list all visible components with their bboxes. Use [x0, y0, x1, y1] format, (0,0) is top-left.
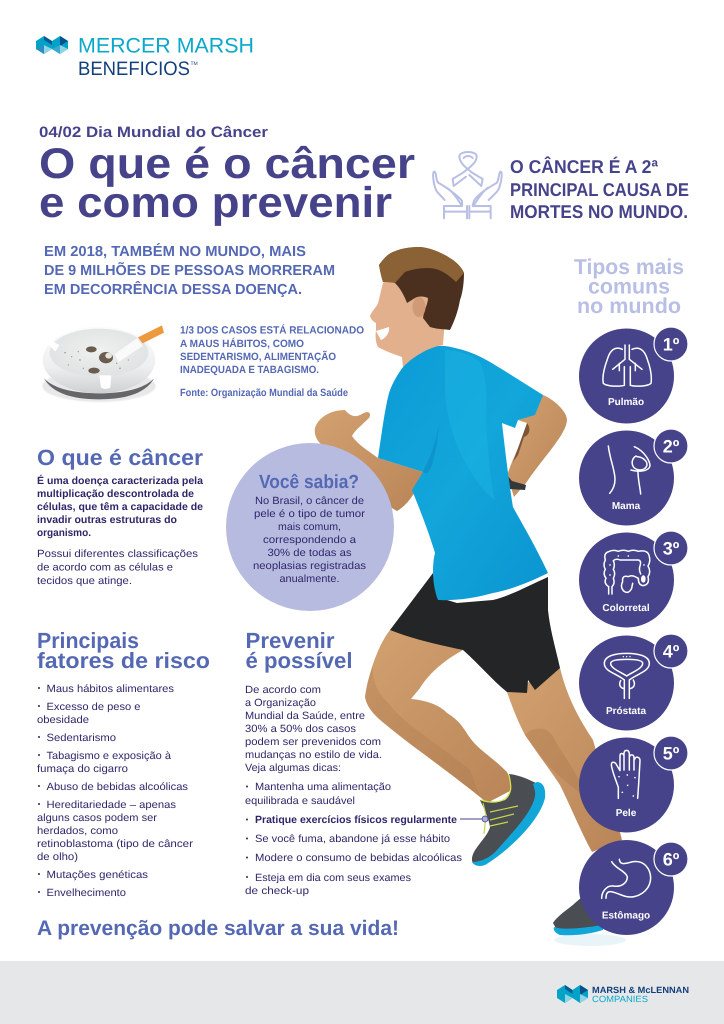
footer band [0, 961, 724, 1024]
label: Próstata [606, 706, 646, 717]
risk list: fumaça do cigarro [37, 763, 128, 775]
logo: Mercer Marsh Beneficios: MERCER MARSH [78, 34, 254, 58]
text block: 9 million deaths: EM DECORRÊNCIA DESSA DOENÇA. [44, 281, 302, 298]
title [39, 140, 415, 227]
risk list: retinoblastoma (tipo de câncer [37, 838, 194, 850]
badge 2: mama [579, 429, 688, 526]
logo: Mercer Marsh Beneficios: TM [190, 61, 198, 67]
callout: second cause of death: PRINCIPAL CAUSA DE [510, 179, 689, 200]
logo: Mercer Marsh Beneficios [36, 34, 254, 80]
text: skin cancer fact: neoplasias registradas [253, 560, 366, 572]
back foot [553, 897, 626, 946]
heading: tipos mais comuns: no mundo [577, 294, 681, 318]
intro: Veja algumas dicas: [245, 762, 341, 774]
icon: logo mark [36, 36, 68, 54]
circle: você sabia [226, 443, 394, 611]
panel: prevenir é possível [245, 628, 462, 897]
text: skin cancer fact: anualmente. [280, 573, 340, 585]
panel: fatores de risco [37, 628, 210, 899]
tips list [245, 781, 462, 897]
text block: 9 million deaths: DE 9 MILHÕES DE PESSOAS MORRERAM [44, 262, 335, 279]
front leg [365, 630, 512, 803]
text block: 9 million deaths: EM 2018, TAMBÉM NO MUNDO, MAIS [44, 243, 306, 260]
rank: 4º [663, 642, 680, 662]
label: Mama [612, 501, 641, 512]
badge 1: pulmão [579, 327, 688, 424]
risk list: Excesso de peso e [46, 701, 141, 713]
risk list: obesidade [37, 714, 89, 726]
heading: você sabia: Você sabia? [259, 472, 359, 493]
badge 5: pele [579, 736, 688, 832]
icon: breast [608, 446, 650, 494]
back leg [507, 668, 622, 852]
intro: mudanças no estilo de vida. [245, 749, 382, 761]
definition [37, 474, 203, 539]
heading: Principais [37, 628, 139, 653]
rank: 5º [663, 744, 680, 764]
risk list: Envelhecimento [46, 887, 126, 899]
text: skin cancer fact: 30% de todas as [268, 547, 352, 559]
risk list [37, 683, 194, 899]
front arm and hand [315, 410, 423, 511]
image: ashtray with cigarette [42, 325, 164, 402]
tips list: equilibrada e saudável [245, 795, 355, 807]
definition: invadir outras estruturas do [37, 514, 177, 526]
badge 3: colorretal [579, 531, 688, 628]
risk list: Tabagismo e exposição à [46, 750, 171, 762]
date line: 04/02 Dia Mundial do Câncer [39, 124, 268, 141]
tips list: Modere o consumo de bebidas alcoólicas [255, 852, 462, 864]
rank: 3º [663, 538, 680, 558]
risk list: Hereditariedade – apenas [46, 799, 176, 811]
classifications: de acordo com as células e [37, 562, 173, 574]
icon: logo mark [557, 985, 588, 1003]
logo: Marsh & McLennan Companies: MARSH & McLENNAN [592, 985, 689, 995]
badge 6: estômago [579, 840, 688, 935]
callout: second cause of death: MORTES NO MUNDO. [510, 201, 688, 222]
text block: one third of cases [180, 324, 364, 399]
text: skin cancer fact [253, 495, 366, 585]
tips list: Se você fuma, abandone já esse hábito [255, 833, 450, 845]
rank: 2º [663, 436, 680, 456]
heading: é possível [246, 648, 352, 673]
callout: second cause of death [510, 156, 689, 222]
rank: 6º [663, 850, 680, 870]
shorts [390, 573, 560, 693]
heading: Prevenir [246, 628, 335, 653]
front shoe [472, 774, 545, 866]
label: Colorretal [602, 603, 650, 614]
tips list: Mantenha uma alimentação [255, 781, 391, 793]
definition: multiplicação descontrolada de [37, 488, 194, 500]
icon: lungs [603, 345, 651, 386]
heading [37, 628, 210, 673]
text block: one third of cases: INADEQUADA E TABAGISMO. [180, 364, 319, 376]
heading: fatores de risco [37, 648, 210, 673]
callout: second cause of death: O CÂNCER É A 2ª [510, 156, 658, 177]
intro: De acordo com [245, 684, 321, 696]
risk list: Sedentarismo [46, 732, 116, 744]
badge 4: próstata [579, 634, 688, 730]
text block: one third of cases: 1/3 DOS CASOS ESTÁ RELACIONADO [180, 324, 364, 336]
logo: Marsh & McLennan Companies [557, 985, 689, 1004]
icon: hand [611, 750, 640, 798]
head [370, 247, 464, 367]
icon: stomach [602, 859, 651, 898]
risk list: herdados, como [37, 825, 118, 837]
heading: tipos mais comuns [574, 255, 684, 318]
label: Pele [616, 808, 637, 819]
intro: a Organização [245, 697, 316, 709]
intro: podem ser prevenidos com [245, 736, 381, 748]
text: skin cancer fact: pele é o tipo de tumor [254, 508, 366, 520]
risk list: de olho) [37, 851, 78, 863]
text: skin cancer fact: No Brasil, o câncer de [255, 495, 364, 507]
definition: É uma doença caracterizada pela [37, 474, 203, 487]
title: O que é o câncer [39, 140, 415, 188]
risk list: alguns casos podem ser [37, 812, 158, 824]
closing message: A prevenção pode salvar a sua vida! [37, 917, 399, 940]
text block: one third of cases: SEDENTARISMO, ALIMENTAÇÃO [180, 350, 336, 363]
risk list: Abuso de bebidas alcoólicas [46, 781, 188, 793]
label: Pulmão [608, 397, 644, 408]
intro [245, 684, 382, 774]
pointer line to shoe [460, 816, 488, 822]
text block: one third of cases: A MAUS HÁBITOS, COMO [180, 337, 304, 350]
rank: 1º [663, 334, 680, 354]
logo: Mercer Marsh Beneficios: BENEFICIOS [78, 58, 190, 80]
icon: colon [604, 550, 650, 594]
text block: 9 million deaths [44, 243, 335, 298]
text: skin cancer fact: correspondendo a [263, 534, 356, 546]
heading [246, 628, 352, 673]
heading: tipos mais comuns: Tipos mais [574, 255, 684, 279]
runner figure [315, 247, 626, 946]
label: Estômago [602, 910, 650, 922]
intro: Mundial da Saúde, entre [245, 710, 365, 722]
classifications [37, 548, 198, 587]
classifications: tecidos que atinge. [37, 575, 132, 587]
definition: células, que têm a capacidade de [37, 501, 203, 513]
icon: ribbon in hands [433, 152, 502, 218]
icon: prostate [604, 653, 649, 698]
shirt [378, 346, 548, 600]
tips list: Esteja em dia com seus exames [255, 872, 411, 884]
heading: tipos mais comuns: comuns [588, 274, 670, 298]
title: e como prevenir [39, 179, 392, 227]
intro: 30% a 50% dos casos [245, 723, 356, 735]
text block: one third of cases: Fonte: Organização Mundial da Saúde [180, 387, 348, 399]
tips list: Pratique exercícios físicos regularmente [255, 814, 457, 826]
panel: o que é câncer [37, 445, 203, 587]
text: skin cancer fact: mais comum, [278, 521, 341, 533]
definition: organismo. [37, 527, 91, 539]
risk list: Maus hábitos alimentares [46, 683, 174, 695]
classifications: Possui diferentes classificações [37, 548, 198, 560]
tips list: de check-up [245, 885, 309, 897]
back arm [505, 395, 567, 497]
risk list: Mutações genéticas [46, 869, 148, 881]
logo: Marsh & McLennan Companies: COMPANIES [592, 994, 648, 1004]
heading: O que é câncer [37, 445, 203, 470]
